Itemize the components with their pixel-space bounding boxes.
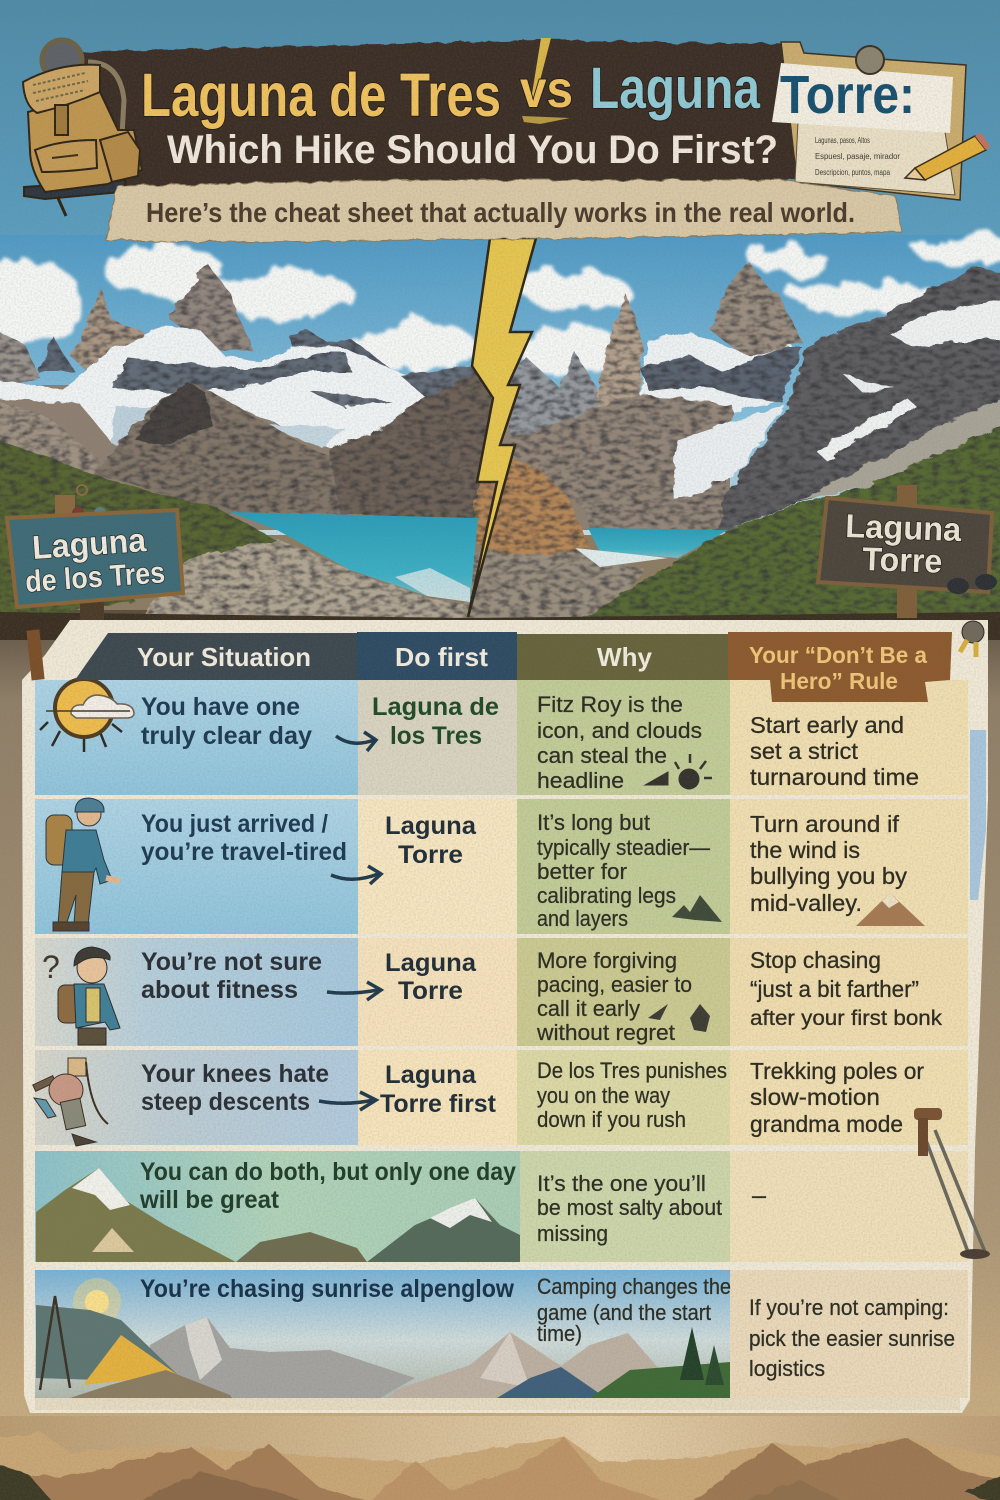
far snowy range, left: peaks	[0, 263, 390, 395]
lightning bolt divider	[468, 238, 536, 617]
crack in banner	[531, 38, 551, 100]
row 3: unsure about fitness: after your first bonk	[750, 1007, 943, 1030]
sign: Laguna de los Tres: Laguna	[31, 521, 148, 566]
row 1: one clear day: can steal the	[537, 743, 667, 768]
arrow	[319, 1092, 376, 1110]
row 6: sunrise alpenglow: logistics	[749, 1356, 825, 1381]
row 1: one clear day: headline	[537, 768, 624, 793]
icon: pencil	[905, 133, 990, 180]
row 6: sunrise alpenglow: Camping changes the	[537, 1274, 731, 1299]
row 5: do both: be most salty about	[537, 1195, 722, 1220]
row 3: unsure about fitness	[35, 938, 968, 1046]
middle rock ridges	[0, 395, 733, 530]
row 6: sunrise alpenglow: game (and the start	[537, 1300, 711, 1325]
row 2: just arrived: you’re travel-tired	[141, 838, 347, 866]
title: vs	[520, 61, 573, 119]
row 4: knees hate descents: grandma mode	[750, 1111, 903, 1137]
row 2: just arrived: It’s long but	[537, 810, 650, 835]
row 5: do both: –	[752, 1182, 766, 1208]
rock base beneath the snowfields	[0, 385, 730, 530]
row 5: do both	[35, 1151, 968, 1262]
icon: dark sun and ridge	[645, 754, 712, 789]
far snowy range, left: snowfield	[0, 325, 490, 450]
row 2: just arrived: Turn around if	[750, 811, 900, 837]
sign: Laguna Torre: Laguna	[845, 507, 963, 548]
table header row: Do first	[395, 642, 488, 672]
row 3: unsure about fitness: Stop chasing	[750, 947, 881, 973]
post at table corner	[26, 629, 45, 680]
row 3: unsure about fitness: pacing, easier to	[537, 972, 692, 997]
row 2: just arrived: You just arrived /	[141, 810, 328, 838]
title	[141, 56, 915, 172]
row 3: unsure about fitness: Laguna	[385, 949, 477, 977]
title: Laguna de Tres	[141, 61, 501, 129]
header banner	[75, 38, 802, 192]
row 3: unsure about fitness: More forgiving	[537, 948, 677, 973]
arrow	[331, 866, 381, 884]
row 6: sunrise alpenglow: If you’re not camping:	[749, 1295, 949, 1320]
icon: backpack	[23, 40, 142, 216]
row 1: one clear day: turnaround time	[750, 764, 919, 790]
row 4: knees hate descents: Your knees hate	[141, 1060, 329, 1088]
row 2: just arrived: bullying you by	[750, 863, 908, 889]
row 1: one clear day: You have one	[141, 693, 300, 721]
far snowy range, right	[510, 260, 802, 440]
icon: knee and pole	[33, 1058, 108, 1146]
row 2: just arrived: typically steadier—	[537, 835, 710, 860]
row 1: one clear day: set a strict	[750, 738, 859, 764]
row 4: knees hate descents: steep descents	[141, 1088, 310, 1116]
row 4: knees hate descents: down if you rush	[537, 1107, 686, 1132]
lake	[230, 512, 478, 602]
row 2: just arrived: mid-valley.	[750, 890, 862, 916]
icon: trekking poles	[914, 1108, 990, 1259]
title: Laguna	[590, 56, 761, 121]
row 3: unsure about fitness: about fitness	[141, 976, 298, 1004]
illustration: mountains and tent	[36, 1168, 520, 1262]
row 2: just arrived: calibrating legs	[537, 883, 676, 908]
row 2: just arrived: Torre	[398, 841, 463, 869]
arrow	[327, 982, 381, 1000]
row 3: unsure about fitness: call it early	[537, 996, 640, 1021]
arrow	[336, 732, 376, 751]
row 6: sunrise alpenglow: You’re chasing sunrise alpenglow	[140, 1275, 515, 1303]
row 4: knees hate descents: Torre first	[380, 1090, 497, 1118]
row 1: one clear day: truly clear day	[141, 722, 312, 750]
icon: small marks	[648, 1004, 710, 1032]
row 4: knees hate descents: Laguna	[385, 1061, 477, 1089]
table header row: Your Situation	[137, 642, 311, 672]
row 6: sunrise alpenglow	[35, 1270, 968, 1398]
row 1: one clear day: los Tres	[390, 722, 482, 750]
clouds	[0, 234, 1000, 378]
row 4: knees hate descents: you on the way	[537, 1083, 670, 1108]
foreground rock and slopes	[0, 433, 645, 625]
row 3: unsure about fitness: “just a bit farther”	[750, 976, 919, 1002]
row 5: do both: missing	[537, 1221, 608, 1246]
row 2: just arrived	[35, 798, 968, 934]
table header row: Your “Don’t Be a	[749, 642, 927, 668]
table header row: Why	[597, 642, 653, 672]
row 6: sunrise alpenglow: time)	[537, 1321, 582, 1346]
row 2: just arrived: Laguna	[385, 812, 477, 840]
notes paper with pin and pencil	[772, 42, 990, 200]
title: Which Hike Should You Do First?	[167, 128, 778, 172]
row 4: knees hate descents: Trekking poles or	[750, 1058, 924, 1084]
sign: Laguna Torre: Torre	[862, 540, 943, 580]
row 4: knees hate descents	[33, 1050, 968, 1146]
notes paper with pin and pencil: Espuesl, pasaje, mirador	[815, 152, 900, 161]
row 5: do both: will be great	[139, 1186, 280, 1214]
panel: decision table	[22, 620, 990, 1413]
row 1: one clear day: Start early and	[750, 712, 904, 738]
right green slope	[583, 418, 1000, 625]
icon: sun behind cloud	[40, 679, 134, 752]
row 5: do both: It’s the one you’ll	[537, 1171, 706, 1196]
illustration: tent, sun and mountains	[36, 1278, 730, 1398]
row 5: do both: You can do both, but only one day	[140, 1158, 516, 1186]
sign: Laguna Torre	[818, 485, 997, 618]
row 1: one clear day	[35, 679, 968, 795]
table header row: Hero” Rule	[780, 668, 898, 694]
row 1: one clear day: Fitz Roy is the	[537, 692, 683, 717]
row 2: just arrived: and layers	[537, 906, 628, 931]
sign: Laguna de los Tres	[7, 485, 183, 625]
far snowy range, left: dark rock bands	[112, 352, 490, 410]
title: Torre:	[780, 65, 915, 125]
icon: unsure hiker	[42, 947, 120, 1045]
row 1: one clear day: Laguna de	[372, 693, 499, 721]
row 3: unsure about fitness: You’re not sure	[141, 948, 322, 976]
notes paper with pin and pencil: Descripcion, puntos, mapa	[815, 168, 890, 177]
row 2: just arrived: better for	[537, 859, 627, 884]
row 6: sunrise alpenglow: pick the easier sunrise	[749, 1326, 955, 1351]
icon: unsure hiker: ?	[42, 949, 60, 985]
row 3: unsure about fitness: Torre	[398, 977, 463, 1005]
subtitle strip: Here’s the cheat sheet that actually works in the real world.	[146, 197, 855, 228]
subtitle strip	[105, 180, 902, 242]
row 4: knees hate descents: De los Tres punishes	[537, 1058, 727, 1083]
mountain range along the bottom	[0, 1416, 1000, 1500]
row 2: just arrived: the wind is	[750, 837, 860, 863]
icon: dark peaks	[672, 895, 722, 922]
row 3: unsure about fitness: without regret	[536, 1020, 675, 1045]
icon: hiker	[46, 798, 120, 931]
notes paper with pin and pencil: Lagunas, pasos, Altos	[815, 136, 870, 145]
icon: brown mountain	[856, 893, 925, 926]
table header row	[75, 632, 952, 702]
row 4: knees hate descents: slow-motion	[750, 1084, 880, 1110]
right dark range	[697, 267, 1000, 532]
row 1: one clear day: icon, and clouds	[537, 718, 702, 743]
sign: Laguna de los Tres: de los Tres	[24, 556, 166, 599]
pin at table corner	[960, 621, 984, 657]
landscape: mountains and lake panorama	[0, 234, 1000, 640]
